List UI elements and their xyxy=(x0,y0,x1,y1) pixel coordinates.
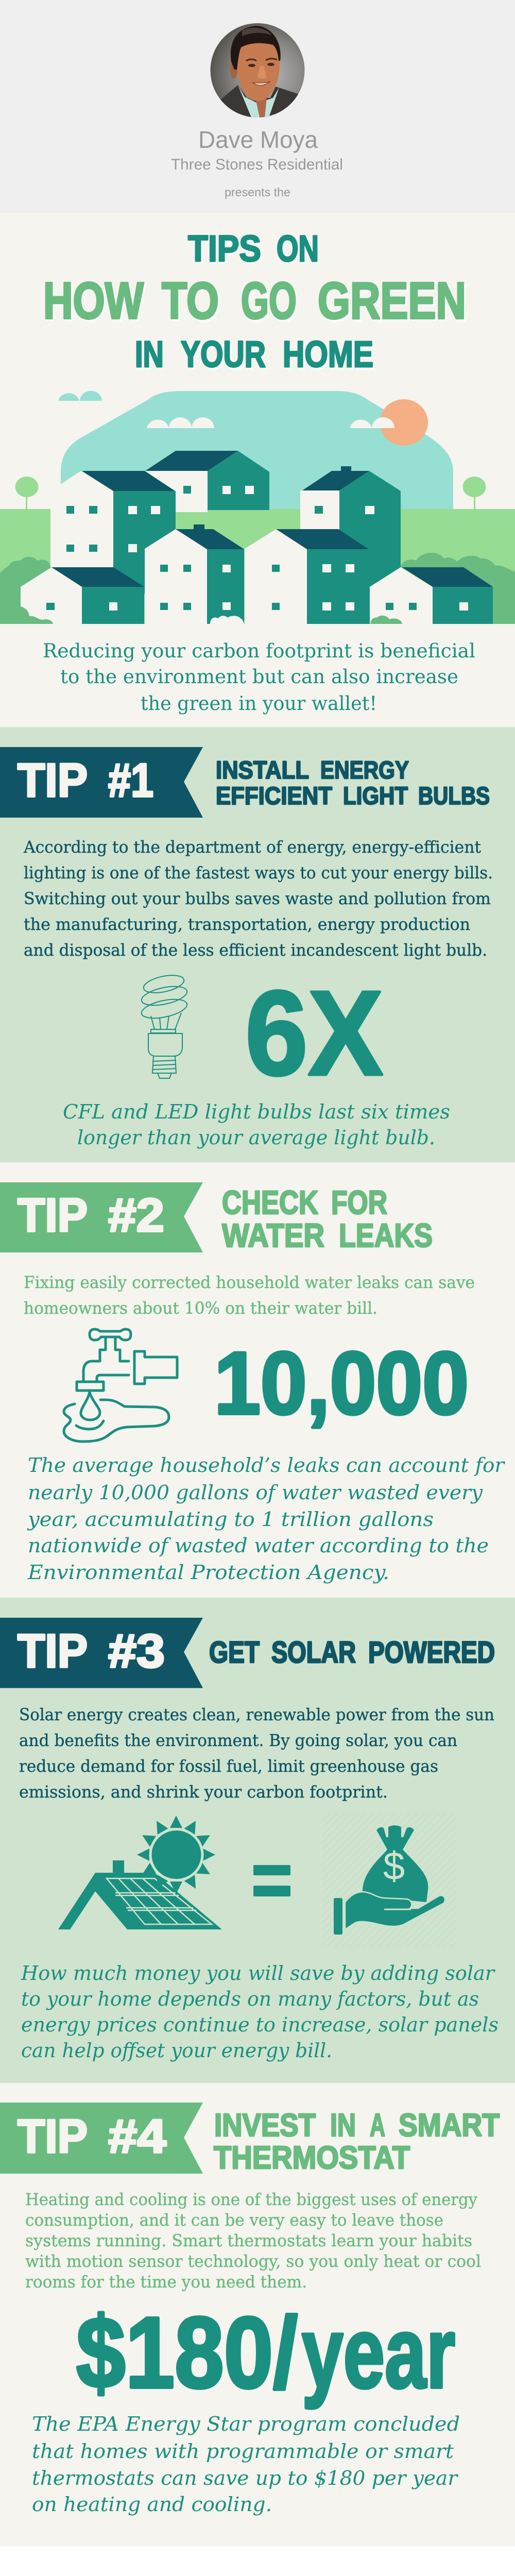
ribbon: tip 1: TIP xyxy=(18,754,88,807)
title: how to go green: TO xyxy=(162,272,219,330)
house: front left xyxy=(0,567,144,624)
intro text: the green in your wallet! xyxy=(141,692,377,715)
heading: tip 4: THERMOSTAT xyxy=(214,2140,410,2176)
title: in your home: IN xyxy=(135,334,164,375)
heading: tip 4: A xyxy=(370,2108,385,2143)
house: front right xyxy=(370,567,493,624)
intro text: Reducing your carbon footprint is beneficial xyxy=(43,640,475,662)
callout: tip 2: year, accumulating to 1 trillion gallons xyxy=(27,1508,434,1531)
panel: title and intro xyxy=(0,213,515,727)
stat: $180 per year xyxy=(76,2296,455,2409)
panel: tip 1 xyxy=(0,727,515,1162)
body text: tip 4: systems running. Smart thermostats learn your habits xyxy=(25,2231,472,2250)
heading: tip 1: BULBS xyxy=(418,783,490,810)
heading: tip 3: GET xyxy=(209,1636,260,1669)
body text: tip 4 xyxy=(25,2190,481,2292)
ribbon: tip 2: TIP xyxy=(18,1189,88,1242)
heading: tip 4: SMART xyxy=(399,2108,500,2143)
body text: tip 2: homeowners about 10% on their water bill. xyxy=(24,1298,377,1318)
ribbon: tip 1 xyxy=(0,747,203,818)
panel: tip 3 xyxy=(0,1598,515,2083)
heading: tip 1: LIGHT xyxy=(343,783,408,810)
clouds xyxy=(58,391,394,428)
callout: tip 1: CFL and LED light bulbs last six times xyxy=(63,1100,450,1123)
title: how to go green: HOW xyxy=(43,272,144,330)
stat: 6X: 6X xyxy=(245,965,383,1100)
stat: $180 per year: year xyxy=(302,2296,455,2409)
heading: tip 3 xyxy=(209,1636,495,1669)
title: how to go green xyxy=(43,272,466,330)
panel: agent header xyxy=(0,0,515,213)
callout: tip 4: on heating and cooling. xyxy=(32,2493,272,2516)
ribbon: tip 3: TIP xyxy=(18,1625,88,1677)
body text: tip 2 xyxy=(24,1273,475,1318)
body text: tip 3: emissions, and shrink your carbon footprint. xyxy=(19,1782,388,1802)
ribbon: tip 4: TIP xyxy=(18,2110,88,2163)
agent company: Three Stones Residential xyxy=(171,156,343,173)
stat: $180 per year: $180/ xyxy=(76,2296,298,2409)
ribbon: tip 4 xyxy=(0,2103,203,2174)
body text: tip 3: and benefits the environment. By going solar, you can xyxy=(19,1731,457,1750)
body text: tip 3: Solar energy creates clean, renewable power from the sun xyxy=(19,1705,494,1724)
ribbon: tip 2: #2 xyxy=(108,1189,164,1242)
ribbon: tip 4: #4 xyxy=(108,2110,166,2163)
title: how to go green: GREEN xyxy=(318,272,466,330)
title: tips on: TIPS xyxy=(188,229,261,269)
ribbon: tip 1: #1 xyxy=(108,754,153,807)
body text: tip 1: Switching out your bulbs saves waste and pollution from xyxy=(24,889,491,908)
presents the: presents the xyxy=(225,185,290,199)
illustration: neighbourhood of houses xyxy=(0,391,515,624)
icon: money bag in hand xyxy=(322,1813,456,1947)
title: tips on: ON xyxy=(277,229,319,269)
callout: tip 3: energy prices continue to increase, solar panels xyxy=(21,2013,499,2036)
heading: tip 4: IN xyxy=(330,2108,356,2143)
callout: tip 2: nearly 10,000 gallons of water wasted every xyxy=(28,1481,483,1504)
callout: tip 4 xyxy=(32,2413,460,2516)
house: front centre right xyxy=(245,529,370,624)
icon: solar panel roof with sun xyxy=(58,1816,222,1929)
callout: tip 3 xyxy=(21,1962,499,2062)
title: in your home: HOME xyxy=(283,334,373,375)
heading: tip 1 xyxy=(216,757,490,810)
body text: tip 1: According to the department of energy, energy-efficient xyxy=(23,837,481,857)
house: back right xyxy=(300,466,401,624)
house: back left xyxy=(145,451,269,512)
title: tips on xyxy=(188,229,319,269)
house: middle left xyxy=(50,471,176,594)
heading: tip 2: CHECK xyxy=(222,1184,318,1221)
heading: tip 2: LEAKS xyxy=(339,1217,433,1254)
title: how to go green: GO xyxy=(241,272,297,330)
callout: tip 1 xyxy=(63,1100,450,1149)
icon: CFL light bulb xyxy=(140,972,188,1078)
heading: tip 2: FOR xyxy=(331,1184,387,1221)
callout: tip 3: to your home depends on many factors, but as xyxy=(21,1988,479,2010)
body text: tip 1: and disposal of the less efficient incandescent light bulb. xyxy=(24,940,487,960)
stat: 10,000: 10,000 xyxy=(214,1334,469,1433)
body text: tip 1: lighting is one of the fastest ways to cut your energy bills. xyxy=(24,863,493,883)
callout: tip 2: nationwide of wasted water according to the xyxy=(28,1534,489,1557)
ground xyxy=(0,509,515,624)
callout: tip 4: The EPA Energy Star program concluded xyxy=(32,2413,460,2435)
body text: tip 4: with motion sensor technology, so you only heat or cool xyxy=(25,2251,481,2271)
heading: tip 4 xyxy=(214,2108,500,2176)
ribbon: tip 3: #3 xyxy=(108,1625,165,1677)
icon: equals sign xyxy=(253,1865,290,1896)
icon: money bag in hand: $ xyxy=(383,1844,405,1888)
ribbon: tip 3 xyxy=(0,1618,203,1688)
intro text: to the environment but can also increase xyxy=(60,666,458,688)
house: front centre left xyxy=(145,524,244,624)
callout: tip 2: The average household’s leaks can account for xyxy=(28,1454,506,1477)
panel: tip 4 xyxy=(0,2083,515,2546)
body text: tip 2: Fixing easily corrected household water leaks can save xyxy=(24,1273,475,1292)
title: in your home xyxy=(135,334,373,375)
body text: tip 4: consumption, and it can be very easy to leave those xyxy=(25,2210,443,2230)
body text: tip 3 xyxy=(19,1705,494,1802)
body text: tip 1: the manufacturing, transportation, energy production xyxy=(24,914,470,934)
callout: tip 4: thermostats can save up to $180 per year xyxy=(32,2467,459,2489)
icon: leaking faucet xyxy=(64,1329,177,1442)
heading: tip 2: WATER xyxy=(222,1217,324,1254)
intro text xyxy=(43,640,475,715)
bushes xyxy=(0,557,52,624)
heading: tip 3: SOLAR xyxy=(271,1636,356,1669)
trees xyxy=(15,477,486,510)
callout: tip 3: How much money you will save by adding solar xyxy=(21,1962,496,1985)
body text: tip 4: Heating and cooling is one of the biggest uses of energy xyxy=(25,2190,477,2209)
body text: tip 3: reduce demand for fossil fuel, limit greenhouse gas xyxy=(19,1756,438,1776)
callout: tip 1: longer than your average light bulb. xyxy=(77,1126,435,1149)
sky shape xyxy=(61,391,453,510)
title: in your home: YOUR xyxy=(181,334,266,375)
panel: tip 2 xyxy=(0,1162,515,1598)
callout: tip 2 xyxy=(27,1454,506,1584)
heading: tip 1: INSTALL xyxy=(216,757,309,784)
callout: tip 3: can help offset your energy bill. xyxy=(21,2039,332,2062)
heading: tip 2 xyxy=(222,1184,433,1254)
callout: tip 2: Environmental Protection Agency. xyxy=(27,1561,389,1584)
agent portrait photo xyxy=(210,23,309,118)
heading: tip 1: ENERGY xyxy=(320,757,409,784)
heading: tip 1: EFFICIENT xyxy=(216,783,332,810)
agent name: Dave Moya xyxy=(198,126,318,153)
body text: tip 4: rooms for the time you need them. xyxy=(25,2272,307,2292)
callout: tip 4: that homes with programmable or smart xyxy=(32,2440,454,2463)
body text: tip 1 xyxy=(23,837,493,960)
ribbon: tip 2 xyxy=(0,1182,203,1252)
sun xyxy=(380,399,428,446)
heading: tip 4: INVEST xyxy=(214,2108,316,2143)
